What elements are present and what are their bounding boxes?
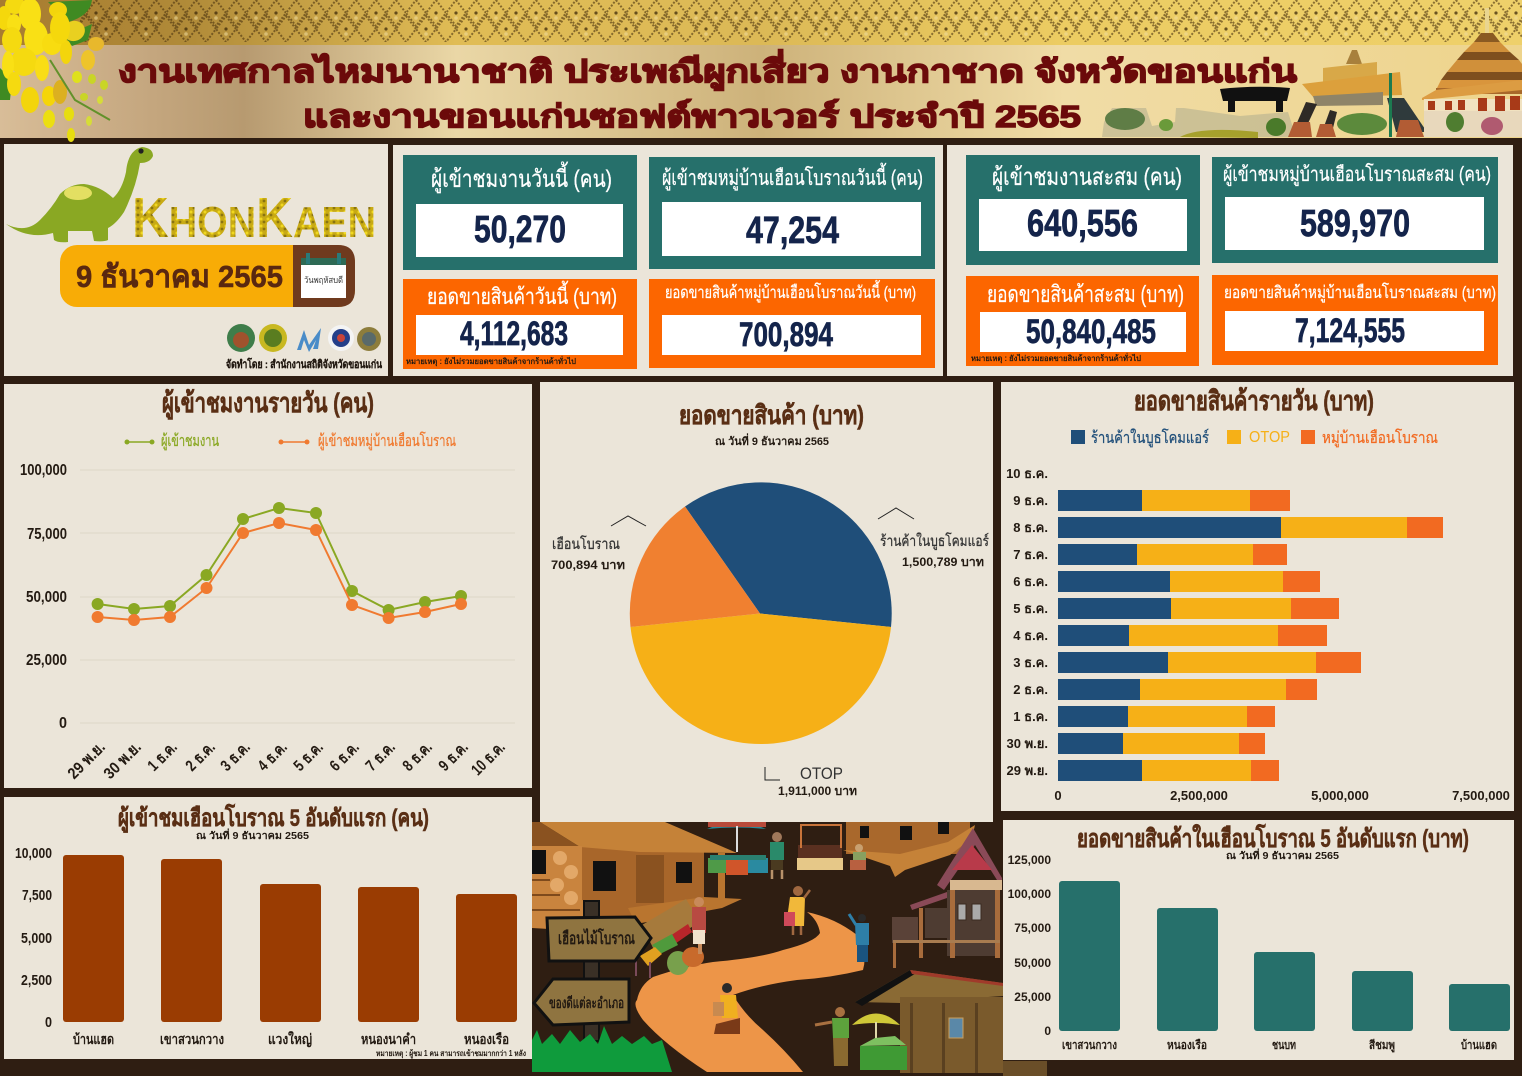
icon: calendar <box>301 253 346 298</box>
card: visitors today: 50,270 <box>474 209 566 251</box>
label: booth stores <box>878 508 989 569</box>
card: village sales today: 700,894 <box>739 316 833 354</box>
icon: calendar: วันพฤหัสบดี <box>304 275 343 285</box>
sign: district goods: ของดีแต่ละอำเภอ <box>549 995 624 1012</box>
bar chart: บ้านแฮด <box>1461 1038 1497 1052</box>
stacked bar chart: 30 พ.ย. <box>1007 736 1048 751</box>
panel: top five village visitors <box>4 797 532 1059</box>
legend <box>1071 428 1438 448</box>
stacked bar chart: 10 ธ.ค. <box>1006 466 1048 481</box>
man in blue <box>849 914 869 962</box>
bar chart: 0 <box>45 1014 52 1031</box>
line chart: 0 <box>59 715 67 732</box>
gate <box>1288 50 1427 137</box>
stacked bar chart: 0 <box>1054 788 1062 803</box>
date note: ณ วันที่ 9 ธันวาคม 2565 <box>1226 848 1339 862</box>
sign <box>1220 87 1290 112</box>
line chart: 2 ธ.ค. <box>183 739 219 775</box>
title: และงานขอนแก่นซอฟต์พาวเวอร์ ประจำปี 2565 <box>303 99 1081 134</box>
bar chart <box>1008 853 1510 1053</box>
fruit stall <box>797 824 843 870</box>
line chart: 9 ธ.ค. <box>436 739 472 775</box>
line chart: 50,000 <box>26 589 67 606</box>
line chart <box>20 462 515 783</box>
stacked bar chart: 8 ธ.ค. <box>1013 520 1048 535</box>
stacked bar chart: 5,000,000 <box>1311 788 1369 803</box>
stacked bar chart: 7,500,000 <box>1452 788 1510 803</box>
seller woman <box>692 897 706 954</box>
bar chart: เขาสวนกวาง <box>160 1031 224 1047</box>
umbrella and tubs <box>707 822 768 875</box>
line chart: 25,000 <box>26 652 67 669</box>
stacked bar chart <box>1006 466 1510 803</box>
icon: golden shower flowers <box>0 0 110 142</box>
icon: khon kaen gate and temple collage <box>1102 8 1522 138</box>
card: cumulative village visitors <box>1212 157 1498 263</box>
card: cumulative visitors: 640,556 <box>1027 203 1138 245</box>
card: village sales today <box>649 279 935 368</box>
card: cumulative visitors <box>966 155 1200 265</box>
line chart: 6 ธ.ค. <box>327 739 363 775</box>
line chart: 1 ธ.ค. <box>145 739 181 775</box>
panel: top five village sales <box>1003 820 1514 1060</box>
line chart: 3 ธ.ค. <box>218 739 254 775</box>
card: village visitors today <box>649 157 935 269</box>
stacked bar chart: 29 พ.ย. <box>1007 763 1048 778</box>
panel: cumulative figures <box>947 145 1513 376</box>
bar chart: หนองเรือ <box>464 1031 509 1047</box>
vegetable stall <box>636 899 704 978</box>
card: cumulative sales: หมายเหตุ : ยังไม่รวมยอดขายสินค้าจากร้านค้าทั่วไป <box>971 352 1141 364</box>
date note: ณ วันที่ 9 ธันวาคม 2565 <box>196 828 309 842</box>
bar chart: 75,000 <box>1014 921 1051 935</box>
bar chart: 50,000 <box>1014 956 1051 970</box>
title <box>118 49 1297 134</box>
heading: ยอดขายสินค้ารายวัน (บาท) <box>1134 386 1374 416</box>
footnote: หมายเหตุ : ผู้ชม 1 คน สามารถเข้าชมมากกว่า 1 หลัง <box>376 1048 526 1059</box>
card: sales today <box>403 279 637 369</box>
heading: ยอดขายสินค้า (บาท) <box>679 400 864 430</box>
line chart: 100,000 <box>20 462 67 479</box>
card: visitors today <box>403 155 637 270</box>
line chart: 4 ธ.ค. <box>255 739 291 775</box>
bar chart: หนองนาคำ <box>361 1031 416 1047</box>
stacked bar chart: 2 ธ.ค. <box>1013 682 1048 697</box>
organisation logos <box>227 324 381 352</box>
stacked bar chart: 1 ธ.ค. <box>1013 709 1048 724</box>
line chart: 29 พ.ย. <box>65 739 109 783</box>
card: sales today: ยอดขายสินค้าวันนี้ (บาท) <box>427 281 617 309</box>
stacked bar chart: 7 ธ.ค. <box>1013 547 1048 562</box>
pie chart <box>630 482 892 744</box>
card: village visitors today: ผู้เข้าชมหมู่บ้านเฮือนโบราณวันนี้ (คน) <box>662 163 923 191</box>
panel: daily visitors line chart <box>4 384 532 788</box>
line chart: 30 พ.ย. <box>101 739 145 783</box>
card: visitors today: ผู้เข้าชมงานวันนี้ (คน) <box>431 161 612 194</box>
sign: old wooden houses: เฮือนไม้โบราณ <box>558 928 635 948</box>
woman walking on path <box>713 983 740 1034</box>
card: cumulative sales: ยอดขายสินค้าสะสม (บาท) <box>987 281 1184 307</box>
bar chart: ชนบท <box>1272 1038 1296 1052</box>
bar chart: 0 <box>1044 1024 1051 1038</box>
thatched hut bottom right <box>855 970 1047 1076</box>
line chart: 7 ธ.ค. <box>363 739 399 775</box>
card: cumulative village sales <box>1212 275 1498 365</box>
card: village sales today: ยอดขายสินค้าหมู่บ้านเฮือนโบราณวันนี้ (บาท) <box>665 280 916 303</box>
man in green <box>815 1007 849 1066</box>
bar chart: 2,500 <box>21 972 52 989</box>
log house top right <box>843 822 975 877</box>
legend <box>124 431 456 451</box>
bar chart: หนองเรือ <box>1167 1038 1207 1052</box>
label: OTOP: OTOP <box>800 764 843 783</box>
card: cumulative sales <box>966 276 1199 366</box>
date pill <box>60 245 355 307</box>
line chart: 5 ธ.ค. <box>291 739 327 775</box>
temple <box>1422 8 1522 137</box>
bar chart: 10,000 <box>15 845 52 862</box>
panel: logo and date <box>4 144 388 376</box>
label: booth stores: ร้านค้าในบูธโคมแอร์ <box>880 532 989 550</box>
label: booth stores: 1,500,789 บาท <box>902 555 984 569</box>
bar chart: แวงใหญ่ <box>268 1030 312 1048</box>
label: OTOP <box>765 764 857 798</box>
woman in yellow dress <box>784 886 810 935</box>
card: cumulative sales: 50,840,485 <box>1026 313 1156 351</box>
card: sales today: หมายเหตุ : ยังไม่รวมยอดขายสินค้าจากร้านค้าทั่วไป <box>406 355 576 367</box>
heading: ผู้เข้าชมงานรายวัน (คน) <box>162 388 374 420</box>
heading: ผู้เข้าชมเฮือนโบราณ 5 อันดับแรก (คน) <box>118 803 429 833</box>
seated vendor <box>850 844 866 870</box>
wooden stilt house right <box>892 828 1002 968</box>
illustration: old village market <box>532 822 1047 1076</box>
green cart and umbrella <box>852 1014 907 1070</box>
line chart: 10 ธ.ค. <box>469 739 509 779</box>
bar chart: 125,000 <box>1008 853 1051 867</box>
bar chart: 100,000 <box>1008 887 1051 901</box>
farmer <box>770 832 784 879</box>
woven silk pattern band <box>0 0 1522 46</box>
stacked bar chart: 4 ธ.ค. <box>1013 628 1048 643</box>
bar chart: บ้านแฮด <box>73 1031 114 1047</box>
legend: ร้านค้าในบูธโคมแอร์ <box>1091 428 1209 448</box>
label: OTOP: 1,911,000 บาท <box>778 784 857 798</box>
signpost <box>534 901 651 1041</box>
card: cumulative village visitors: 589,970 <box>1300 203 1410 245</box>
date pill: 9 ธันวาคม 2565 <box>76 259 283 294</box>
bar chart: 5,000 <box>21 930 52 947</box>
legend: หมู่บ้านเฮือนโบราณ <box>1322 428 1438 448</box>
panel: daily sales stacked bars <box>1001 382 1514 811</box>
card: cumulative village sales: 7,124,555 <box>1295 312 1405 350</box>
date note: ณ วันที่ 9 ธันวาคม 2565 <box>715 433 829 448</box>
market path <box>635 912 865 1072</box>
line chart: 8 ธ.ค. <box>400 739 436 775</box>
legend: ผู้เข้าชมงาน <box>161 432 219 451</box>
stacked bar chart: 2,500,000 <box>1170 788 1228 803</box>
label: old houses <box>551 516 646 572</box>
logo wordmark: KHONKAEN <box>132 186 376 250</box>
panel: today's figures <box>393 145 943 376</box>
panel: sales pie chart <box>540 382 993 822</box>
bar chart <box>15 845 517 1048</box>
label: old houses: เฮือนโบราณ <box>552 535 620 553</box>
stacked bar chart: 6 ธ.ค. <box>1013 574 1048 589</box>
bar chart: 25,000 <box>1014 990 1051 1004</box>
icon: dinosaur <box>6 147 153 242</box>
organiser credit: จัดทำโดย : สำนักงานสถิติจังหวัดขอนแก่น <box>226 357 382 371</box>
stacked bar chart: 3 ธ.ค. <box>1013 655 1048 670</box>
title: งานเทศกาลไหมนานาชาติ ประเพณีผูกเสี่ยว งานกาชาด จังหวัดขอนแก่น <box>118 49 1297 91</box>
legend: OTOP <box>1249 429 1290 446</box>
card: village visitors today: 47,254 <box>746 210 839 252</box>
bar chart: สีชมพู <box>1369 1038 1395 1053</box>
card: cumulative visitors: ผู้เข้าชมงานสะสม (คน) <box>992 164 1182 192</box>
log house left <box>532 822 742 932</box>
stacked bar chart: 5 ธ.ค. <box>1013 601 1048 616</box>
bar chart: 7,500 <box>22 887 52 904</box>
title band <box>0 45 1522 138</box>
grass <box>532 1026 672 1072</box>
legend: ผู้เข้าชมหมู่บ้านเฮือนโบราณ <box>318 431 456 451</box>
line chart: 75,000 <box>27 526 67 543</box>
stacked bar chart: 9 ธ.ค. <box>1013 493 1048 508</box>
bar chart: เขาสวนกวาง <box>1062 1038 1117 1052</box>
card: sales today: 4,112,683 <box>460 315 568 353</box>
label: old houses: 700,894 บาท <box>551 558 625 572</box>
